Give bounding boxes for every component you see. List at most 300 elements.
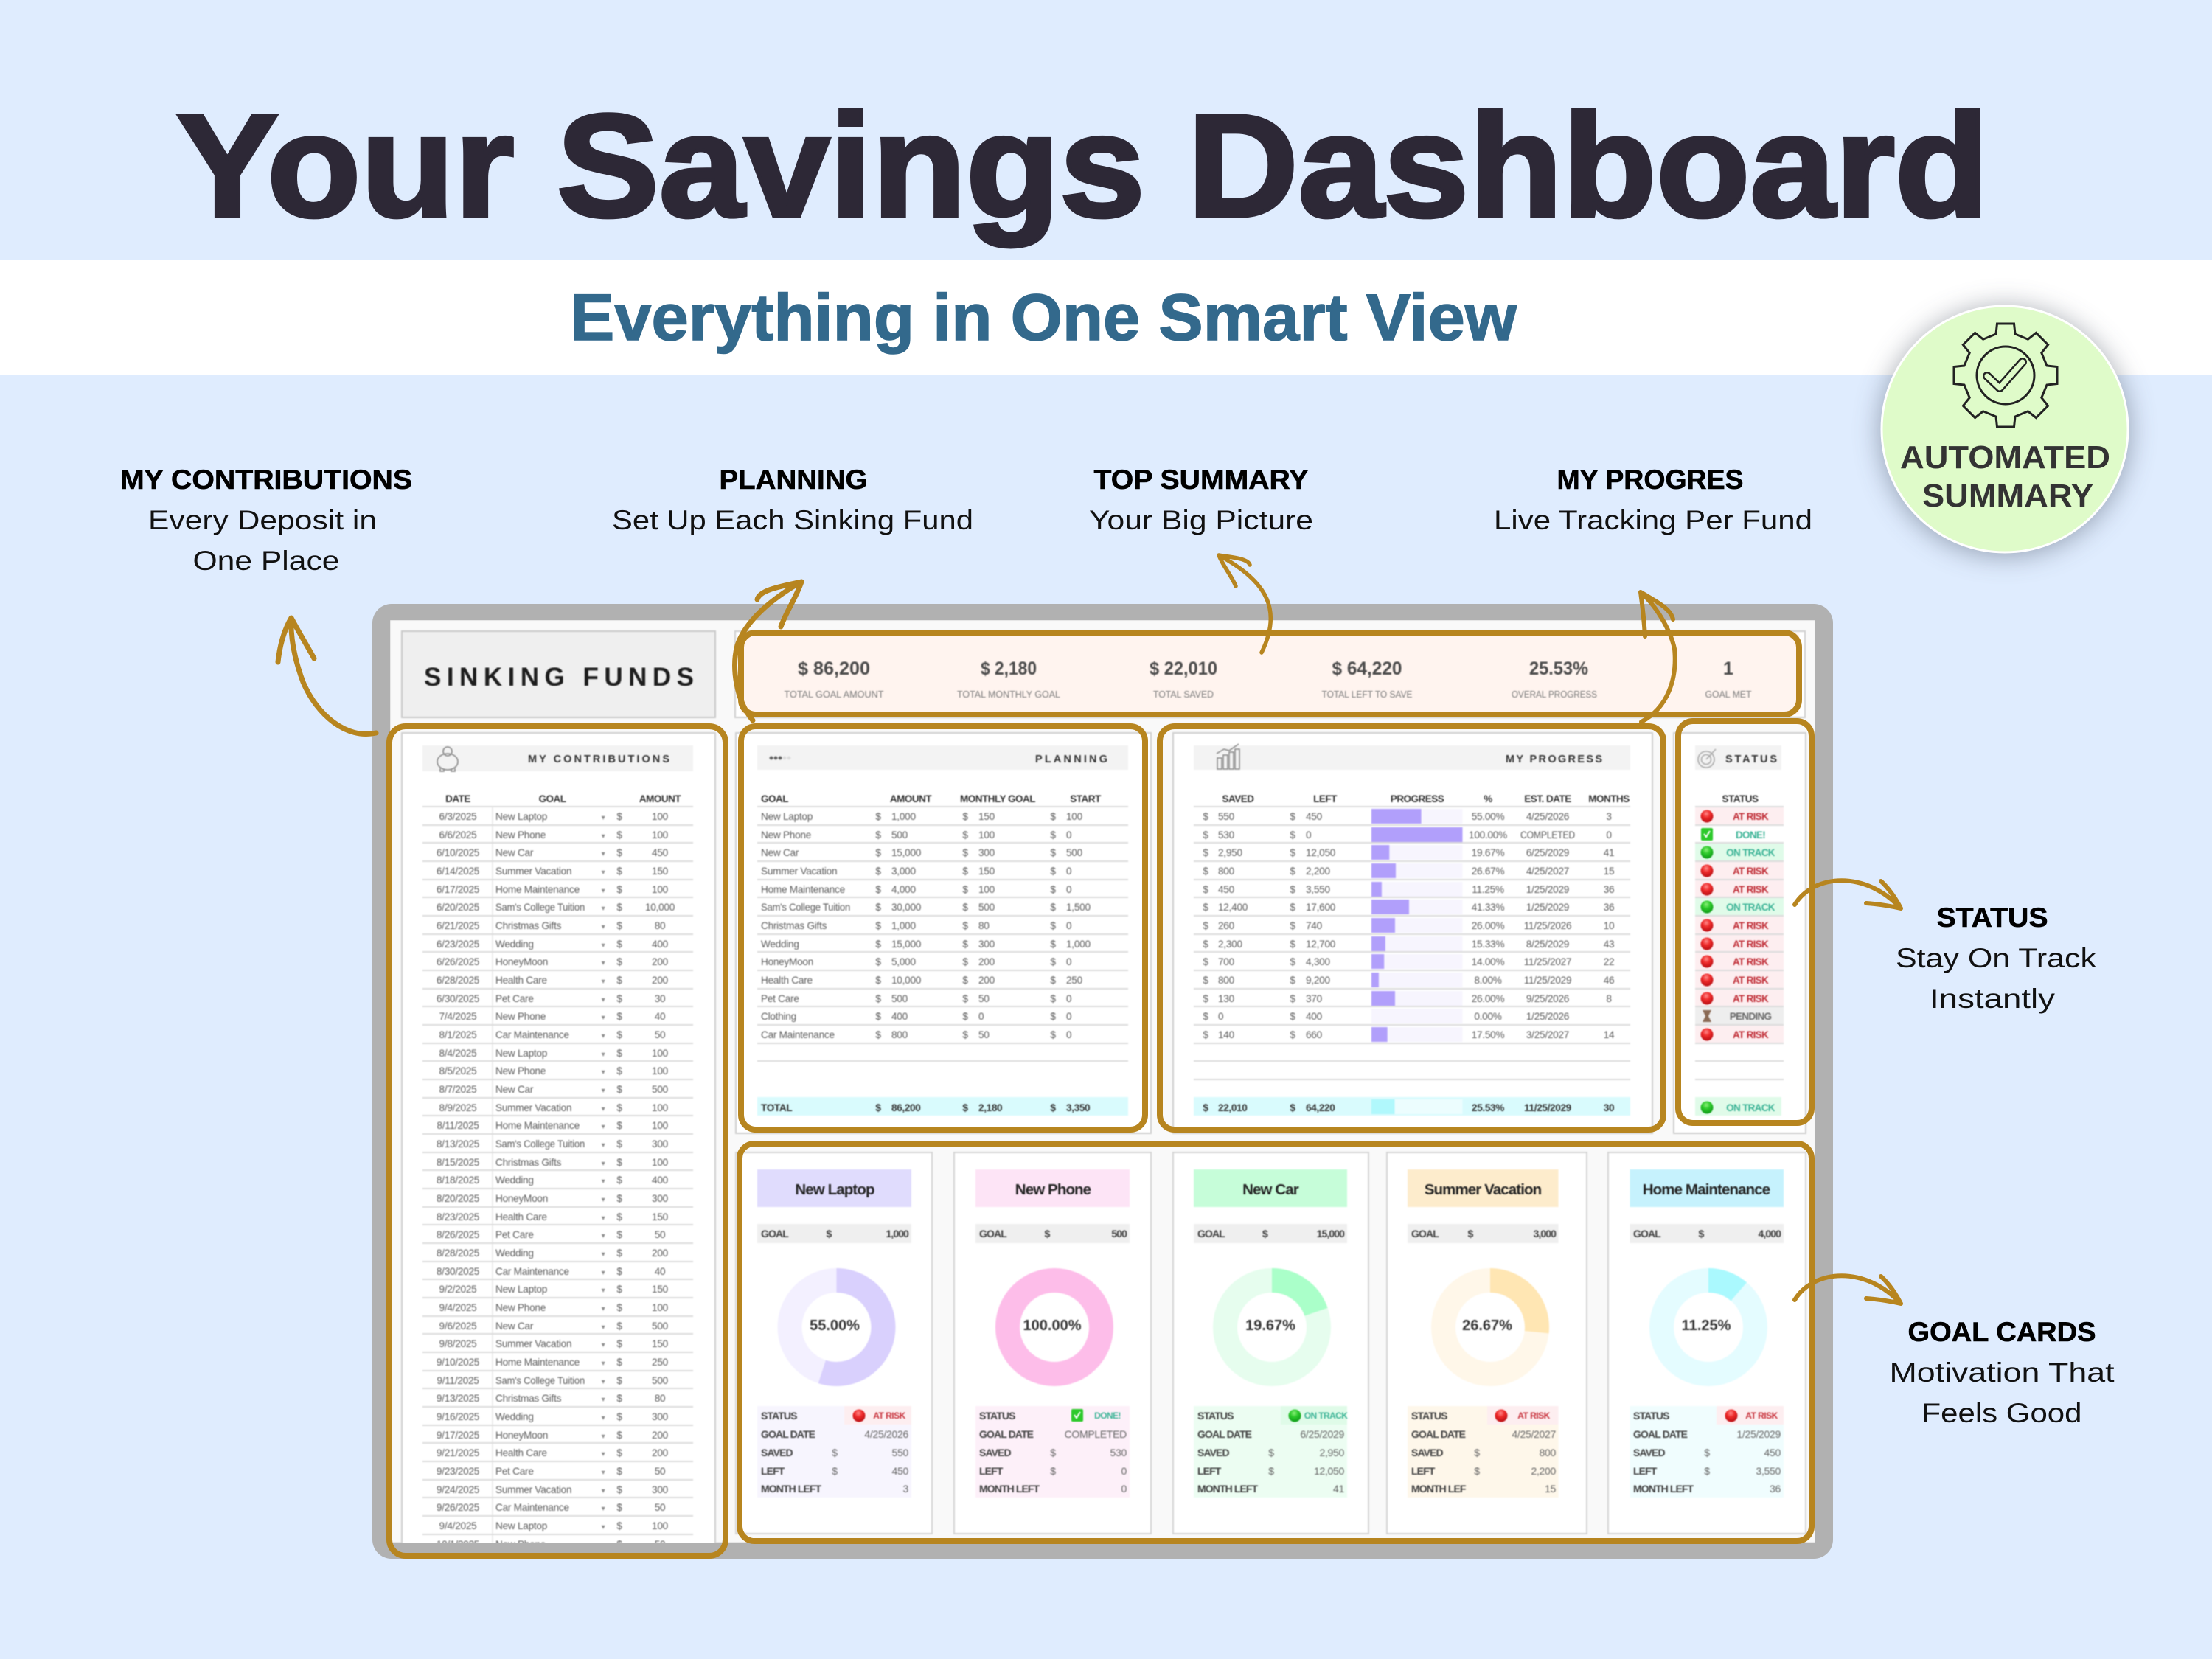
goal card: summer vacation: SAVED [1411,1447,1443,1458]
goal card: summer vacation: $ [1474,1447,1480,1458]
panel: planning: 0 [1066,956,1072,967]
panel: planning: $ [1050,975,1056,986]
panel: my contributions: ▾ [602,1469,605,1477]
panel: planning: Car Maintenance [761,1029,835,1040]
panel: my progress: EST. DATE [1524,793,1571,804]
panel: planning: 500 [891,993,908,1004]
panel: my progress: $ [1290,830,1295,841]
panel: my contributions: $ [616,956,622,967]
panel: planning: 500 [1066,847,1083,858]
panel: planning: $ [962,884,968,895]
panel: my contributions: 200 [652,1248,669,1259]
panel: status: AT RISK [1733,920,1769,931]
panel: my contributions: 50 [655,1539,666,1550]
panel: my contributions: $ [616,1175,622,1186]
panel: top summary: TOTAL GOAL AMOUNT [785,689,884,700]
panel: my contributions: $ [616,1357,622,1368]
panel: my contributions: ▾ [602,1196,605,1204]
callout: goal cards: Feels Good [1921,1398,2082,1428]
donut chart [1662,1280,1755,1374]
panel: my contributions: $ [616,1266,622,1277]
panel: my progress: MY PROGRESS [1506,754,1602,765]
callout: my progress: MY PROGRES [1557,465,1743,495]
panel: my contributions: Home Maintenance [495,1357,580,1368]
callout: goal cards: Motivation That [1889,1357,2115,1388]
panel: planning: 3,000 [891,866,916,877]
panel: my progress: 55.00% [1472,811,1504,822]
goal card: summer vacation: AT RISK [1517,1411,1551,1421]
arrow: top summary [1219,555,1270,653]
panel: planning: 200 [978,975,995,986]
callout: my contributions: Every Deposit in [148,505,377,535]
panel: planning: 1,000 [1066,939,1091,950]
panel: my contributions: Home Maintenance [495,1120,580,1131]
panel: my contributions: 8/23/2025 [437,1211,479,1222]
panel: my contributions: ▾ [602,1051,605,1059]
panel: my progress: $ [1203,975,1208,986]
panel: my contributions: 150 [652,1211,669,1222]
panel: my progress: 14 [1604,1029,1615,1040]
panel: my contributions: 100 [652,811,669,822]
callout: my progress [1494,465,1812,535]
panel: planning: START [1070,793,1102,804]
panel: my progress: $ [1203,1102,1208,1113]
panel: my contributions: ▾ [602,905,605,913]
panel: my contributions: Car Maintenance [495,1029,569,1040]
panel: planning: Clothing [761,1011,796,1022]
goal card: summer vacation: $ [1468,1228,1474,1239]
panel: my progress: $ [1290,920,1295,931]
panel: my contributions: $ [616,1466,622,1477]
panel: my contributions: Christmas Gifts [495,1157,562,1168]
panel: my contributions: ▾ [602,923,605,931]
goal card: new car: 12,050 [1314,1465,1345,1477]
panel: my contributions: ▾ [602,1542,605,1550]
panel: my contributions: DATE [445,793,470,804]
goal card: new laptop: 1,000 [886,1228,909,1239]
goal card: new car: ON TRACK [1304,1411,1348,1421]
panel: my progress: 2,950 [1218,847,1242,858]
goal card: new phone: 100.00% [1023,1318,1082,1334]
panel: planning: 86,200 [891,1102,920,1113]
panel: my progress: 64,220 [1306,1102,1335,1113]
panel: my contributions: 50 [655,1229,666,1240]
highlight frame: goal cards [740,1144,1812,1541]
panel: my progress: $ [1290,884,1295,895]
panel: my progress: 17,600 [1306,902,1336,913]
panel: my contributions: ▾ [602,1305,605,1313]
panel: planning: $ [962,975,968,986]
panel: planning: 150 [978,811,995,822]
panel: my contributions: $ [616,1484,622,1495]
panel: my contributions: $ [616,1229,622,1240]
panel: my contributions: ▾ [602,1324,605,1332]
goal card: new phone: 530 [1110,1447,1127,1458]
panel: my contributions: New Car [495,1084,534,1095]
panel: my progress: 0 [1306,830,1312,841]
panel: my contributions: 100 [652,1102,669,1113]
panel: my contributions: ▾ [602,1450,605,1458]
goal card: summer vacation: 3,000 [1533,1228,1557,1239]
panel: my contributions: $ [616,847,622,858]
panel: my contributions: $ [616,866,622,877]
panel: my contributions: $ [616,1065,622,1077]
panel: planning: 80 [978,920,990,931]
panel: planning: $ [1050,847,1056,858]
panel: my contributions: Pet Care [495,1229,534,1240]
panel: planning: $ [962,902,968,913]
panel: sinking funds title [402,631,715,717]
panel: my contributions: Wedding [495,1411,534,1422]
panel: planning: $ [962,993,968,1004]
panel: my contributions: $ [616,1375,622,1386]
panel: my progress: 660 [1306,1029,1323,1040]
panel: planning: $ [1050,1029,1056,1040]
goal card: new car: 2,950 [1319,1447,1345,1458]
panel: my contributions: Wedding [495,939,534,950]
panel: planning: $ [875,975,881,986]
panel: my contributions: 6/23/2025 [437,939,479,950]
panel: my contributions: 9/4/2025 [439,1520,476,1531]
panel: status: AT RISK [1733,811,1769,822]
goal card: new phone: 0 [1121,1465,1127,1477]
goal card: new laptop: 4/25/2026 [864,1428,909,1440]
panel: status: AT RISK [1733,884,1769,895]
panel: planning: 30,000 [891,902,922,913]
goal card: new phone: LEFT [979,1465,1004,1477]
panel: planning: 1,000 [891,920,916,931]
goal card: new laptop: GOAL DATE [761,1428,815,1440]
panel: my contributions: ▾ [602,1341,605,1349]
panel: planning: 0 [1066,1011,1072,1022]
panel: my progress: 8 [1606,993,1612,1004]
arrow: my progress [1641,592,1675,722]
panel: planning: $ [875,866,881,877]
panel: my progress: 26.00% [1472,993,1504,1004]
panel: my contributions: $ [616,884,622,895]
goal card: new laptop: LEFT [761,1465,785,1477]
goal card: new phone: DONE! [1094,1411,1121,1421]
panel: my contributions: ▾ [602,814,605,822]
dashboard screenshot [390,620,1815,1551]
panel: my contributions: MY CONTRIBUTIONS [528,754,669,765]
panel: my progress: $ [1203,920,1208,931]
highlight frame: my contributions [389,726,726,1556]
panel: my progress: 4/25/2027 [1526,866,1569,877]
panel: my progress: 43 [1604,939,1614,950]
panel: my progress: 3,550 [1306,884,1330,895]
panel: my contributions: New Phone [495,1539,546,1550]
goal card: new car: STATUS [1197,1410,1234,1422]
panel: my contributions: ▾ [602,1105,605,1113]
panel: planning: $ [875,993,881,1004]
callout: goal cards [1889,1317,2115,1428]
panel: planning: $ [1050,866,1056,877]
panel: my contributions: 50 [655,1466,666,1477]
panel: top summary: TOTAL MONTHLY GOAL [957,689,1060,700]
panel: my progress: 17.50% [1472,1029,1504,1040]
panel: my contributions: ▾ [602,1214,605,1222]
panel: my progress: 41.33% [1472,902,1504,913]
panel: my contributions: 300 [652,1484,669,1495]
goal card: home maintenance: 4,000 [1758,1228,1781,1239]
panel: my progress: $ [1290,1011,1295,1022]
goal card: new laptop: GOAL [761,1228,789,1239]
panel: planning: $ [962,956,968,967]
panel: my contributions: 6/3/2025 [439,811,476,822]
panel: planning: 10,000 [891,975,922,986]
panel: my contributions: 450 [652,847,669,858]
panel: my contributions: Health Care [495,1211,547,1222]
panel: my progress: 12,700 [1306,939,1336,950]
panel: planning: 15,000 [891,939,922,950]
panel: my contributions: 9/2/2025 [439,1284,476,1295]
panel: my contributions: ▾ [602,1287,605,1295]
panel: my progress: % [1484,793,1492,804]
panel: my contributions: ▾ [602,1087,605,1095]
panel: my contributions: $ [616,1193,622,1204]
panel: my contributions: 400 [652,1175,669,1186]
donut chart [1225,1280,1318,1374]
panel: status: STATUS [1722,793,1759,804]
panel: top summary: $ 22,010 [1150,658,1217,679]
panel: planning: 500 [978,902,995,913]
panel: my contributions: Car Maintenance [495,1502,569,1513]
panel: planning: $ [962,866,968,877]
goal card: new car: 6/25/2029 [1300,1428,1345,1440]
goal card: new car: 15,000 [1317,1228,1345,1239]
panel: planning: $ [875,939,881,950]
panel: status: ON TRACK [1726,847,1775,858]
panel: my contributions: 9/17/2025 [437,1430,479,1441]
panel: my contributions: ▾ [602,996,605,1004]
goal card: summer vacation: STATUS [1411,1410,1447,1422]
panel: my contributions: 400 [652,939,669,950]
panel: planning: GOAL [761,793,788,804]
panel: my contributions: 9/24/2025 [437,1484,479,1495]
panel: my progress: $ [1203,902,1208,913]
panel: planning: New Phone [761,830,811,841]
callout: top summary: Your Big Picture [1089,505,1313,535]
panel: planning: $ [875,902,881,913]
panel: my contributions: ▾ [602,1123,605,1131]
panel: planning: 200 [978,956,995,967]
panel: my progress: SAVED [1222,793,1254,804]
panel: my contributions: Wedding [495,1175,534,1186]
panel: my progress: 100.00% [1469,830,1507,841]
goal card: new phone [954,1152,1151,1534]
panel: my contributions: $ [616,1502,622,1513]
panel: my contributions: ▾ [602,1487,605,1495]
goal card: new laptop: 55.00% [810,1318,860,1334]
goal card: new car: GOAL DATE [1197,1428,1252,1440]
panel: planning: 1,000 [891,811,916,822]
title: Your Savings Dashboard [176,84,1989,247]
goal card: home maintenance: Home Maintenance [1643,1181,1770,1198]
panel: top summary: OVERAL PROGRESS [1512,689,1597,700]
panel: my contributions: 8/26/2025 [437,1229,479,1240]
panel: my contributions: $ [616,1120,622,1131]
goal card: new car: MONTH LEFT [1197,1483,1259,1495]
highlight frame: planning [741,726,1145,1130]
goal card: summer vacation: 15 [1545,1483,1557,1495]
panel: my contributions: $ [616,1321,622,1332]
panel: my contributions: 8/18/2025 [437,1175,479,1186]
panel: planning: 250 [1066,975,1083,986]
panel: my progress: 9,200 [1306,975,1330,986]
goal card: home maintenance: 36 [1770,1483,1781,1495]
panel: my contributions: 200 [652,975,669,986]
panel: planning: $ [1050,902,1056,913]
panel: planning: TOTAL [761,1102,792,1113]
panel: planning: $ [875,1011,881,1022]
panel: my contributions: 9/23/2025 [437,1466,479,1477]
panel: my contributions: $ [616,993,622,1004]
panel: status: AT RISK [1733,956,1769,967]
panel: my contributions: 6/17/2025 [437,884,479,895]
panel: my progress: $ [1290,1102,1295,1113]
panel: my progress: 12,050 [1306,847,1336,858]
panel: my progress: 400 [1306,1011,1323,1022]
panel: my contributions: $ [616,811,622,822]
panel: planning: 100 [978,884,995,895]
panel: top summary: 25.53% [1529,658,1588,679]
panel: my progress: $ [1290,939,1295,950]
panel: my progress: LEFT [1313,793,1338,804]
panel: planning: 400 [891,1011,908,1022]
panel: planning: $ [1050,1102,1056,1113]
highlight frame: status [1678,721,1812,1123]
panel: my progress: 1/25/2029 [1526,884,1569,895]
panel: planning: $ [962,811,968,822]
panel: planning: $ [962,1029,968,1040]
goal card: new car: LEFT [1197,1465,1222,1477]
panel: my contributions: $ [616,1248,622,1259]
panel: my contributions: Summer Vacation [495,1102,571,1113]
panel: my contributions: $ [616,1284,622,1295]
panel: planning: Sam's College Tuition [761,902,850,913]
panel: my contributions: ▾ [602,887,605,895]
goal card: home maintenance: 11.25% [1682,1318,1731,1334]
panel: my contributions: 150 [652,866,669,877]
callout: status [1896,902,2097,1014]
panel: planning: 1,500 [1066,902,1091,913]
panel: my progress: MONTHS [1588,793,1630,804]
panel: planning: 0 [1066,830,1072,841]
panel: my progress: 46 [1604,975,1614,986]
callout: my contributions: MY CONTRIBUTIONS [120,465,412,495]
panel: my contributions: HoneyMoon [495,956,548,967]
panel: my contributions: ▾ [602,1360,605,1368]
panel: my progress: 11/25/2027 [1524,956,1571,967]
panel: my contributions: 6/14/2025 [437,866,479,877]
panel: planning: 300 [978,847,995,858]
panel: my progress: 3 [1606,811,1612,822]
panel: my contributions: 200 [652,1447,669,1458]
goal card: home maintenance: 450 [1764,1447,1781,1458]
panel: my progress: 0 [1218,1011,1224,1022]
panel: planning: Home Maintenance [761,884,845,895]
panel: planning: $ [875,811,881,822]
panel: my progress: $ [1290,902,1295,913]
panel: my contributions: ▾ [602,942,605,950]
goal card: summer vacation: GOAL [1411,1228,1439,1239]
badge: automated summary: AUTOMATED [1900,439,2110,476]
panel: my progress: 6/25/2029 [1526,847,1569,858]
panel: my contributions: 50 [655,1029,666,1040]
panel: planning: 0 [1066,920,1072,931]
panel: my contributions: $ [616,1011,622,1022]
panel: my progress: 11/25/2029 [1524,975,1571,986]
goal card: home maintenance: $ [1699,1228,1705,1239]
panel: my contributions: ▾ [602,1414,605,1422]
panel: planning: $ [1050,939,1056,950]
panel: status: ON TRACK [1726,902,1775,913]
donut chart [1444,1280,1537,1374]
icon: target [1698,749,1716,768]
goal card: home maintenance: $ [1704,1447,1710,1458]
panel: my contributions: $ [616,1102,622,1113]
panel: my contributions: New Car [495,847,534,858]
panel: my progress: 10 [1604,920,1615,931]
panel: my progress: 130 [1218,993,1235,1004]
callout: top summary: TOP SUMMARY [1094,465,1309,495]
goal card: new phone: $ [1050,1447,1056,1458]
callout: my contributions: One Place [193,546,339,576]
panel: my contributions: 200 [652,1430,669,1441]
panel: my contributions: Pet Care [495,993,534,1004]
panel: my progress: 450 [1218,884,1235,895]
callout: top summary [1089,465,1313,535]
panel: planning: $ [962,920,968,931]
panel: planning: 500 [891,830,908,841]
panel: my contributions: Summer Vacation [495,1338,571,1349]
panel: planning: $ [962,1011,968,1022]
panel: my contributions: 8/7/2025 [439,1084,476,1095]
goal card: home maintenance: 1/25/2029 [1736,1428,1781,1440]
goal card: summer vacation: 26.67% [1462,1318,1512,1334]
panel: my contributions: $ [616,1302,622,1313]
panel: my contributions: ▾ [602,1141,605,1150]
panel: planning: 3,350 [1066,1102,1090,1113]
panel: my contributions: ▾ [602,1068,605,1077]
goal card: home maintenance: 3,550 [1756,1465,1781,1477]
panel: my contributions: 200 [652,956,669,967]
panel: my contributions: ▾ [602,1269,605,1277]
panel: my contributions: $ [616,1539,622,1550]
progress bars [1371,809,1463,1042]
panel: my contributions: 6/30/2025 [437,993,479,1004]
panel: my contributions: Sam's College Tuition [495,1375,585,1386]
panel: my progress: 530 [1218,830,1235,841]
panel: my contributions: GOAL [538,793,566,804]
panel: status: DONE! [1736,830,1765,841]
panel: my contributions: 10,000 [645,902,675,913]
panel: status: AT RISK [1733,993,1769,1004]
panel: planning: Christmas Gifts [761,920,827,931]
panel: planning: 15,000 [891,847,922,858]
panel: my progress: $ [1290,847,1295,858]
arrow: status [1795,880,1901,908]
panel: my contributions: ▾ [602,1523,605,1531]
panel: my contributions: $ [616,1411,622,1422]
dashboard monitor frame [372,604,1833,1559]
panel: my contributions: 300 [652,1193,669,1204]
panel: my contributions: 9/11/2025 [437,1375,479,1386]
goal card: summer vacation: GOAL DATE [1411,1428,1466,1440]
panel: planning [736,733,1151,1133]
panel: my contributions: 8/11/2025 [437,1120,479,1131]
